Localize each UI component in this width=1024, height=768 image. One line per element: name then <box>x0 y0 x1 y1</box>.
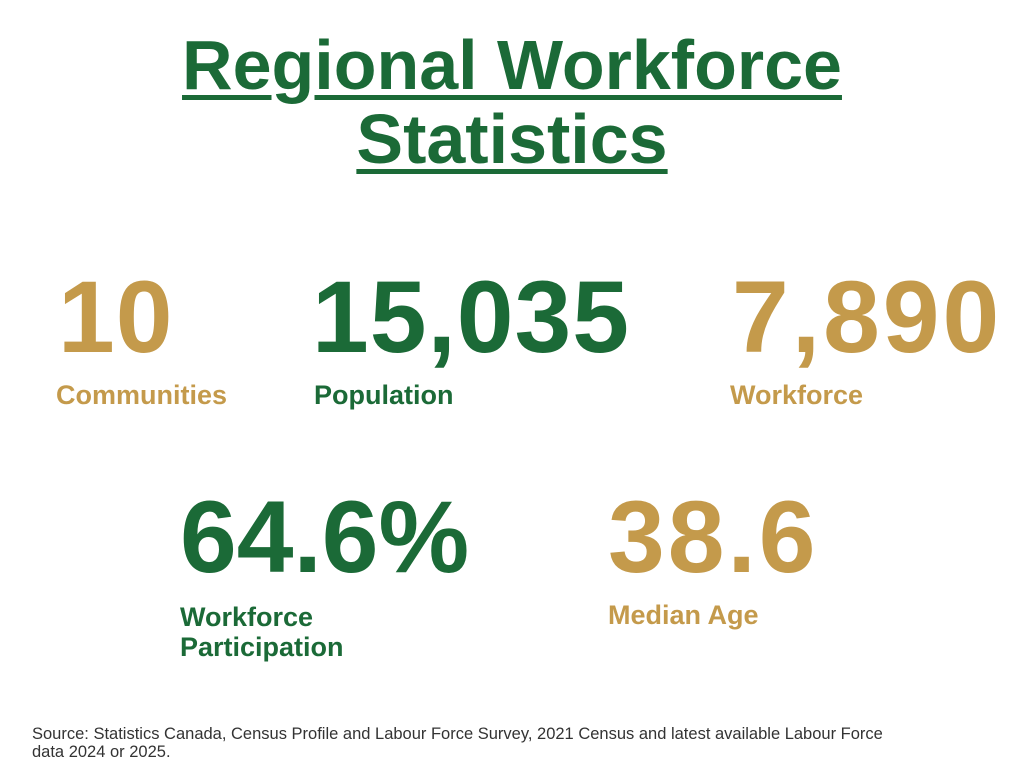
label: workforce participation: Participation <box>180 632 344 662</box>
number: 38.6: 38.6 <box>608 480 819 594</box>
title <box>182 26 842 178</box>
label: workforce: Workforce <box>730 380 863 410</box>
stat: population <box>312 260 630 410</box>
title: Regional Workforce <box>182 26 842 104</box>
source note <box>32 725 883 761</box>
stat: participation <box>180 480 469 662</box>
label: workforce participation: Workforce <box>180 602 313 632</box>
label: workforce participation <box>180 602 344 662</box>
source note: Source: Statistics Canada, Census Profile and Labour Force Survey, 2021 Census and latest available Labour Force <box>32 725 883 743</box>
stat: median age <box>608 480 819 630</box>
number: 15,035: 15,035 <box>312 260 630 374</box>
number: 64.6%: 64.6% <box>180 480 469 594</box>
number: 7,890: 7,890 <box>732 260 1002 374</box>
title: Statistics <box>356 100 668 178</box>
stat: workforce <box>730 260 1002 410</box>
source note: data 2024 or 2025. <box>32 743 171 761</box>
label: population: Population <box>314 380 453 410</box>
number: 10: 10 <box>58 260 173 374</box>
label: median age: Median Age <box>608 600 759 630</box>
label: communities: Communities <box>56 380 227 410</box>
stat: communities <box>56 260 227 410</box>
